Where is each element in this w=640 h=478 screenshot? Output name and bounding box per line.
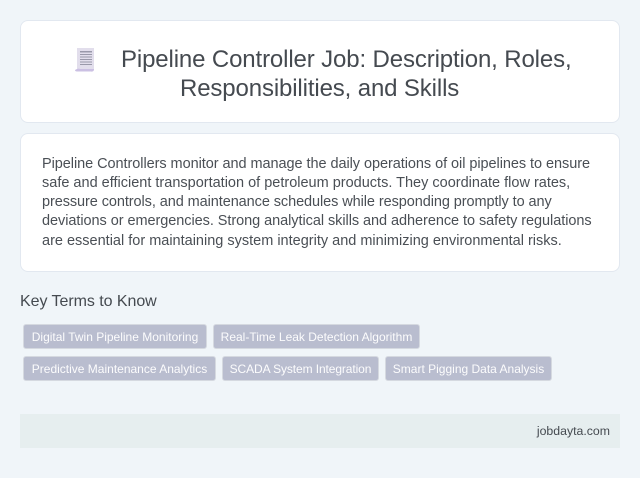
tag [23,356,216,381]
panel: description card [20,133,620,272]
tag [23,324,207,349]
heading: key terms: Key Terms to Know [20,293,157,310]
title line 1: Pipeline Controller Job: Description, Roles, [121,46,572,73]
tag [213,324,420,349]
description text [42,156,592,249]
tag [385,356,552,381]
description text: are essential for maintaining system integrity and minimizing environmental risks. [42,233,562,249]
tag: Smart Pigging Data Analysis [393,362,544,376]
tag: Digital Twin Pipeline Monitoring [32,330,198,344]
footer bar [20,414,620,448]
tag: SCADA System Integration [230,362,371,376]
description text: pressure controls, and maintenance schedules while responding promptly to any [42,194,552,210]
title line 2: Responsibilities, and Skills [180,75,459,102]
description text: safe and efficient transportation of petroleum products. They coordinate flow rates, [42,175,570,191]
tag: Predictive Maintenance Analytics [32,362,207,376]
description text: Pipeline Controllers monitor and manage the daily operations of oil pipelines to ensure [42,156,590,172]
tag group [23,324,552,381]
description text: deviations or emergencies. Strong analytical skills and adherence to safety regulations [42,213,592,229]
tag [222,356,379,381]
icon: document scroll [75,48,94,72]
tag: Real-Time Leak Detection Algorithm [221,330,412,344]
panel: title card [20,20,620,123]
footer source: jobdayta.com [537,424,610,438]
